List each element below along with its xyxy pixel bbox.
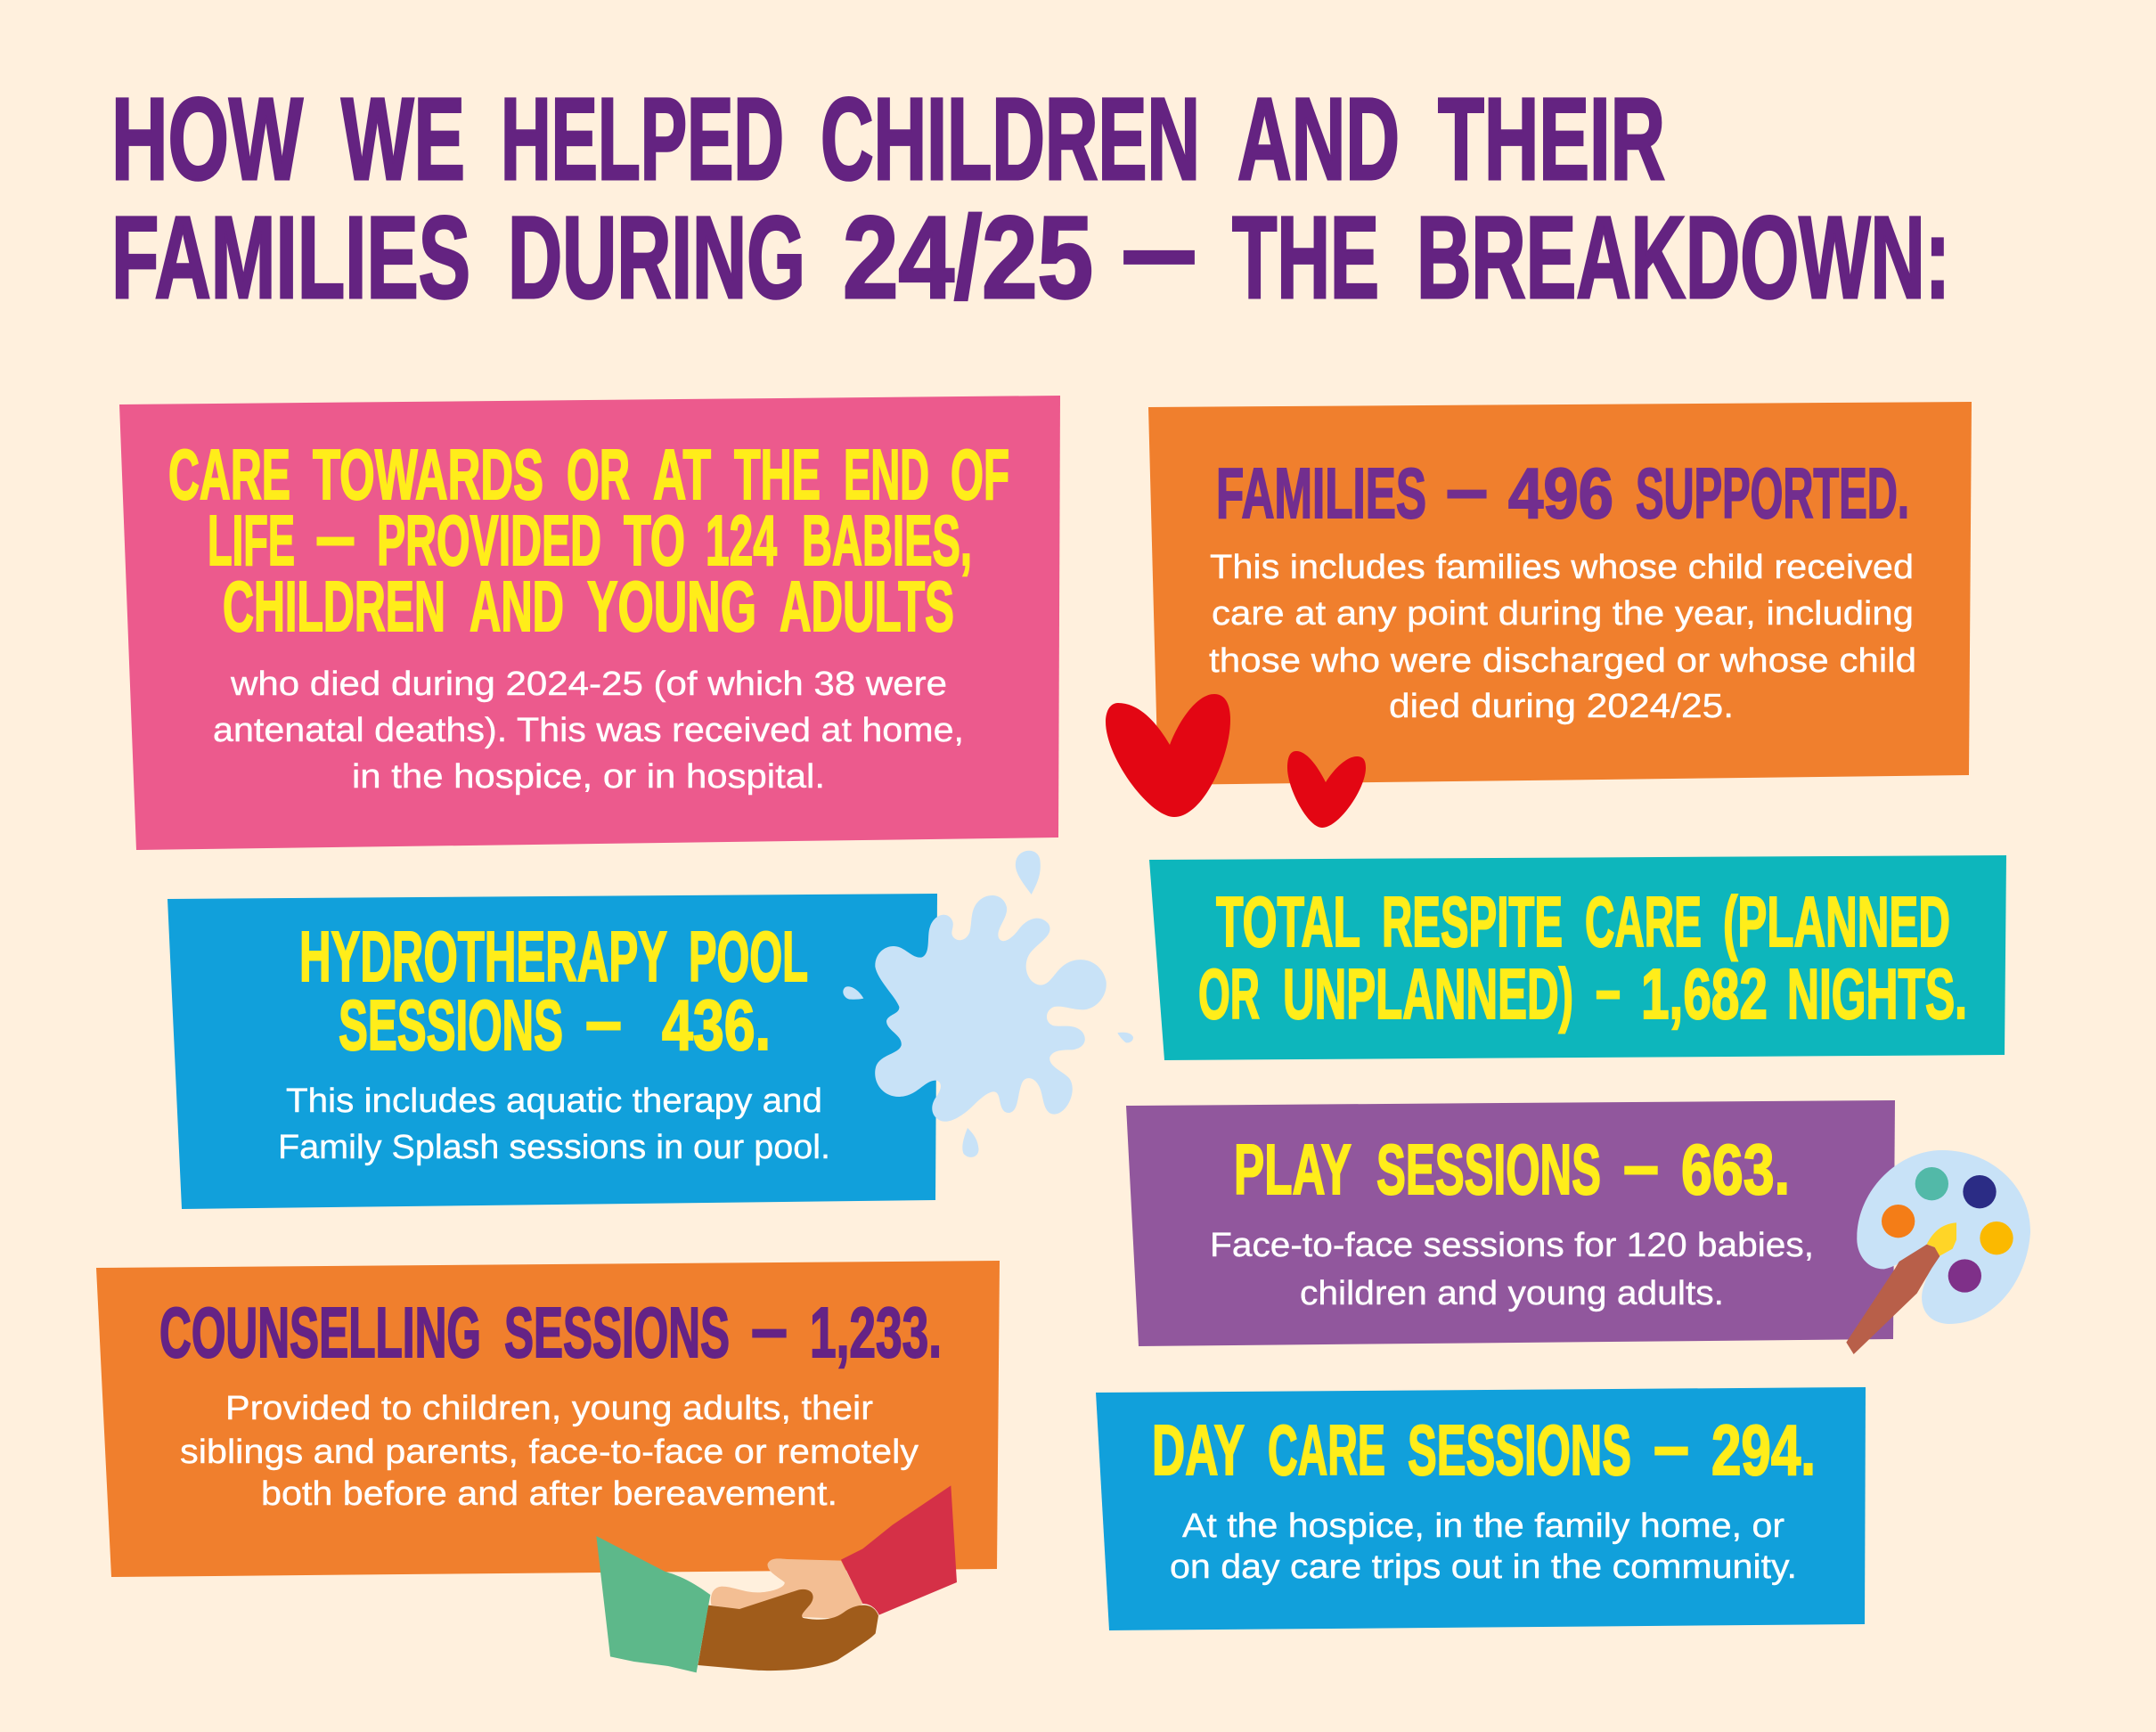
heading: end of life care: TOWARDS	[313, 435, 543, 514]
text block: hydrotherapy detail: Family Splash sessions in our pool.	[278, 1129, 830, 1166]
text block: day care detail	[1170, 1507, 1797, 1586]
heading: families: SUPPORTED.	[1636, 453, 1909, 533]
heading: end of life care: 124	[706, 501, 777, 580]
panel: hydrotherapy pool sessions	[167, 894, 937, 1209]
title: HOW	[111, 73, 303, 204]
text block: counselling detail	[180, 1390, 919, 1513]
heading: day care: SESSIONS	[1408, 1410, 1631, 1490]
heading: respite care: 1,682	[1641, 954, 1768, 1033]
text block: end of life detail	[213, 666, 964, 796]
heading: counselling: COUNSELLING	[159, 1293, 481, 1372]
icon: small red heart	[1287, 751, 1366, 828]
panel: counselling sessions	[96, 1261, 1000, 1577]
heading: play sessions: PLAY	[1234, 1130, 1352, 1209]
heading: counselling	[159, 1288, 942, 1372]
text block: families detail: care at any point during the year, including	[1212, 595, 1914, 633]
text block: play detail	[1210, 1227, 1814, 1312]
text block: end of life detail: who died during 2024-25 (of which 38 were	[230, 666, 947, 703]
heading: hydrotherapy: HYDROTHERAPY	[299, 917, 667, 996]
icon: paint palette and brush	[1846, 1150, 2030, 1354]
heading: day care: CARE	[1268, 1410, 1385, 1490]
heading: families	[1216, 449, 1909, 533]
text block: hydrotherapy detail	[278, 1082, 830, 1166]
icon: holding hands	[596, 1485, 957, 1672]
heading: day care	[1152, 1406, 1816, 1490]
panel: total respite care	[1149, 855, 2006, 1060]
panel: day care sessions	[1096, 1387, 1866, 1630]
title: DURING	[508, 192, 805, 323]
icon: large red heart	[1106, 694, 1230, 817]
title: HELPED	[501, 73, 784, 204]
text block: families detail	[1209, 549, 1916, 725]
heading: play sessions: –	[1623, 1125, 1659, 1205]
title: THEIR	[1438, 73, 1665, 204]
text block: families detail: died during 2024/25.	[1389, 688, 1734, 725]
heading: respite care: –	[1596, 950, 1621, 1029]
heading: end of life care: OF	[951, 435, 1009, 514]
title	[111, 73, 1950, 323]
icon: water splash	[843, 851, 1133, 1157]
heading: hydrotherapy: POOL	[689, 917, 808, 996]
title: —	[1124, 183, 1194, 314]
text block: day care detail: At the hospice, in the family home, or	[1182, 1507, 1784, 1545]
heading: end of life care: ADULTS	[780, 567, 954, 646]
text block: hydrotherapy detail: This includes aquatic therapy and	[286, 1082, 822, 1120]
heading: end of life care: AT	[653, 435, 711, 514]
heading: end of life care: THE	[734, 435, 821, 514]
panel: care towards or at the end of life	[119, 396, 1060, 850]
heading: end of life care: BABIES,	[802, 501, 972, 580]
heading: hydrotherapy	[299, 917, 808, 1065]
heading: end of life care: CHILDREN	[223, 567, 445, 646]
heading: respite care: RESPITE	[1382, 882, 1563, 961]
heading: respite care	[1198, 882, 1967, 1033]
heading: hydrotherapy: 436.	[662, 985, 771, 1065]
heading: end of life care: —	[317, 496, 354, 576]
text block: counselling detail: siblings and parents, face-to-face or remotely	[180, 1434, 919, 1471]
heading: counselling: 1,233.	[810, 1293, 942, 1372]
heading: counselling: SESSIONS	[504, 1293, 730, 1372]
heading: end of life care	[168, 435, 1009, 646]
heading: day care: –	[1654, 1406, 1689, 1485]
heading: play sessions: SESSIONS	[1376, 1130, 1601, 1209]
heading: end of life care: LIFE	[208, 501, 295, 580]
heading: respite care: CARE	[1585, 882, 1702, 961]
title: 24/25	[843, 192, 1093, 323]
heading: respite care: NIGHTS.	[1787, 954, 1967, 1033]
heading: end of life care: OR	[567, 435, 630, 514]
panel: play sessions	[1126, 1100, 1895, 1346]
heading: end of life care: CARE	[168, 435, 290, 514]
heading: end of life care: PROVIDED	[377, 501, 601, 580]
heading: day care: DAY	[1152, 1410, 1245, 1490]
heading: play sessions	[1234, 1125, 1790, 1209]
heading: families: FAMILIES	[1216, 453, 1426, 533]
heading: hydrotherapy: –	[585, 981, 622, 1060]
heading: day care: 294.	[1711, 1410, 1816, 1490]
text block: counselling detail: both before and after bereavement.	[261, 1475, 837, 1513]
text block: play detail: Face-to-face sessions for 120 babies,	[1210, 1227, 1814, 1264]
heading: play sessions: 663.	[1681, 1130, 1790, 1209]
heading: end of life care: AND	[470, 567, 564, 646]
heading: respite care: TOTAL	[1216, 882, 1360, 961]
title: AND	[1237, 73, 1400, 204]
text block: day care detail: on day care trips out in the community.	[1170, 1548, 1797, 1586]
heading: respite care: OR	[1198, 954, 1260, 1033]
heading: end of life care: TO	[624, 501, 685, 580]
heading: respite care: UNPLANNED)	[1283, 954, 1573, 1033]
text block: families detail: This includes families whose child received	[1210, 549, 1914, 586]
heading: families: 496	[1508, 453, 1613, 533]
heading: end of life care: END	[844, 435, 929, 514]
heading: counselling: –	[751, 1288, 788, 1368]
text block: end of life detail: antenatal deaths). This was received at home,	[213, 712, 964, 749]
title: THE	[1232, 192, 1379, 323]
text block: counselling detail: Provided to children, young adults, their	[225, 1390, 873, 1427]
text block: end of life detail: in the hospice, or in hospital.	[352, 758, 825, 796]
title: CHILDREN	[821, 73, 1200, 204]
panel: families supported	[1148, 402, 1972, 785]
text block: families detail: those who were discharged or whose child	[1209, 642, 1916, 680]
heading: respite care: (PLANNED	[1723, 882, 1950, 961]
heading: families: —	[1448, 449, 1486, 528]
heading: hydrotherapy: SESSIONS	[339, 985, 563, 1065]
text block: play detail: children and young adults.	[1300, 1275, 1724, 1312]
heading: end of life care: YOUNG	[587, 567, 756, 646]
title: WE	[341, 73, 465, 204]
title: FAMILIES	[111, 192, 470, 323]
